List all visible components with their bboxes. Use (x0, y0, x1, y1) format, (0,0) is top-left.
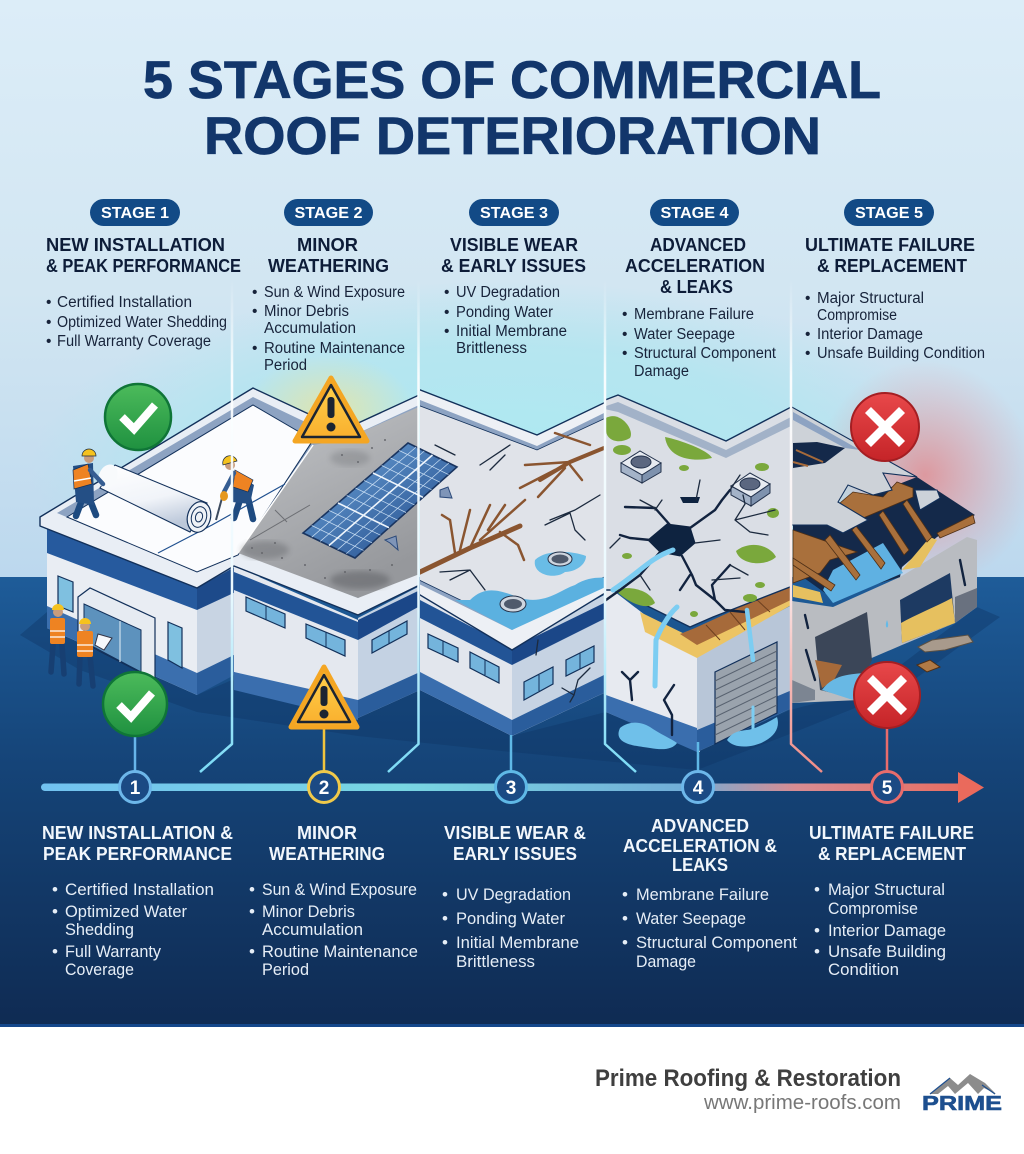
panel: stage 3 top (441, 199, 586, 357)
heading: VISIBLE WEAR & (444, 822, 586, 843)
list: • (249, 942, 255, 961)
stage 1 walls (47, 528, 240, 695)
wall cracks (622, 672, 674, 735)
ponding water (455, 578, 610, 630)
stage 4 list: • (622, 326, 627, 343)
list (814, 880, 946, 979)
list: • (52, 880, 58, 899)
stage 1 list: • (46, 294, 51, 311)
status icon: upper cross (851, 393, 919, 461)
list: Brittleness (456, 952, 535, 971)
stage 5 list: Interior Damage (817, 326, 923, 343)
stage 2 badge (284, 199, 373, 226)
stage 1 heading: NEW INSTALLATION (46, 234, 225, 255)
heading (269, 822, 385, 864)
stage 2 badge: STAGE 2 (294, 205, 363, 222)
stage 4 heading (625, 234, 765, 297)
stage 5 building: ultimate failure (785, 406, 977, 703)
stage 5 list: Compromise (817, 307, 897, 324)
heading (444, 822, 586, 864)
stage 3 list: Initial Membrane (456, 323, 567, 340)
dark ground band (0, 577, 1024, 1025)
stage 2 list: Routine Maintenance (264, 340, 405, 357)
company name and website: Prime Roofing & Restoration (595, 1065, 901, 1092)
heading: WEATHERING (269, 843, 385, 864)
stage 5 heading: & REPLACEMENT (817, 255, 968, 276)
stage 4 list: • (622, 345, 627, 362)
status icon: lower check (103, 672, 167, 736)
stage 1 list: Full Warranty Coverage (57, 333, 211, 350)
list: Period (262, 960, 309, 979)
list: • (442, 885, 448, 904)
stage 3 list: Brittleness (456, 340, 527, 357)
stage 3 list: • (444, 323, 449, 340)
exposed rafters and water (793, 477, 975, 593)
stage 4 list: Damage (634, 363, 689, 380)
sky background (0, 0, 1024, 660)
membrane roll (98, 464, 212, 533)
company name and website: www.prime-roofs.com (703, 1092, 901, 1114)
torn membrane (790, 406, 917, 533)
stage 1 list: • (46, 333, 51, 350)
list: Coverage (65, 960, 134, 979)
list: Compromise (828, 899, 918, 918)
stage 3 list: Ponding Water (456, 304, 553, 321)
stage 1 list: • (46, 314, 51, 331)
list: Condition (828, 960, 899, 979)
status icon: lower cross (854, 662, 920, 728)
panel: stage 1 bottom (42, 822, 233, 979)
list: Structural Component (636, 933, 797, 952)
stage 4 list: Membrane Failure (634, 306, 754, 323)
heading: MINOR (297, 822, 357, 843)
timeline node 4 (682, 772, 714, 802)
stage 4 heading: ADVANCED (650, 234, 746, 255)
stage 5 badge: STAGE 5 (855, 205, 923, 222)
worker with tool (216, 456, 254, 520)
list: • (622, 933, 628, 952)
stage 2 list: Period (264, 357, 307, 374)
stage 3 list: • (444, 284, 449, 301)
foam and wood edge (640, 600, 790, 658)
stage 1 list: Certified Installation (57, 294, 192, 311)
panel: stage 3 bottom (442, 822, 586, 971)
list: • (52, 902, 58, 921)
list: Sun & Wind Exposure (262, 880, 417, 899)
stage 3 badge (469, 199, 559, 226)
list: • (622, 909, 628, 928)
list: • (442, 933, 448, 952)
list: Water Seepage (636, 909, 746, 928)
stage 5 list: • (805, 345, 810, 362)
connector: stage 3 (510, 735, 512, 772)
stage 2 list: Minor Debris (264, 303, 349, 320)
list: • (622, 885, 628, 904)
list: Accumulation (262, 920, 363, 939)
ground shadow (20, 607, 1000, 770)
stage 5 heading: ULTIMATE FAILURE (805, 234, 975, 255)
hole and cracks (606, 475, 775, 612)
timeline node 5 (872, 772, 902, 802)
panel: stage 4 bottom (622, 815, 797, 971)
stage 1 heading (46, 234, 241, 276)
heading: LEAKS (672, 854, 728, 875)
panel: stage 2 bottom (249, 822, 418, 979)
connector: stage 2 (323, 728, 325, 772)
status icon: upper check (105, 384, 171, 450)
panel: stage 5 bottom (809, 822, 974, 979)
heading: ACCELERATION & (623, 835, 777, 856)
stage 5 badge (844, 199, 934, 226)
heading: PEAK PERFORMANCE (43, 843, 232, 864)
heading: ULTIMATE FAILURE (809, 822, 974, 843)
list: • (814, 921, 820, 940)
title: ROOF DETERIORATION (204, 107, 821, 166)
stage 4 badge: STAGE 4 (660, 205, 729, 222)
list (249, 880, 418, 979)
stage 4 list (622, 306, 777, 380)
list: • (814, 880, 820, 899)
timeline node 3: 3 (506, 778, 516, 799)
stage 3 list (444, 284, 567, 357)
stage 2 list: Accumulation (264, 320, 356, 337)
timeline node 2 (308, 772, 340, 802)
stage 4 building: advanced leaks (600, 395, 795, 752)
company logo: PRIME (922, 1093, 1002, 1115)
leak puddles (618, 723, 677, 749)
stage 4 badge (650, 199, 739, 226)
fallen branches (418, 433, 604, 573)
stage 1 badge (90, 199, 180, 226)
stage 2 heading (268, 234, 389, 276)
panel: stage 4 top (622, 199, 777, 380)
list: Initial Membrane (456, 933, 579, 952)
stage 4 list: • (622, 306, 627, 323)
roof rim (40, 388, 430, 615)
solar panel (303, 443, 457, 558)
building illustration (20, 388, 1000, 770)
stage 2 grey roof (238, 402, 430, 598)
worker with roll (73, 449, 103, 516)
drains (500, 552, 572, 612)
panel: stage 5 top (805, 199, 985, 362)
list: Interior Damage (828, 921, 946, 940)
stage 1 list (46, 294, 227, 350)
timeline node 1 (120, 772, 150, 802)
list: Membrane Failure (636, 885, 769, 904)
stage 4 list: Structural Component (634, 345, 777, 362)
status icon: lower warning (291, 667, 357, 727)
timeline node 1: 1 (130, 778, 141, 799)
connector: stage 5 (886, 728, 888, 772)
list: Full Warranty (65, 942, 161, 961)
stage 2 list: • (252, 303, 257, 320)
connector: stage 1 (134, 736, 136, 772)
list: Damage (636, 952, 696, 971)
heading: EARLY ISSUES (453, 843, 577, 864)
moss (606, 416, 779, 617)
timeline node 2: 2 (319, 778, 329, 799)
seam (158, 484, 285, 553)
list: Optimized Water (65, 902, 187, 921)
opening right (900, 573, 955, 643)
stage 1 membrane (67, 405, 313, 572)
list: Shedding (65, 920, 134, 939)
company name and website (595, 1065, 901, 1114)
stage 2 list: Sun & Wind Exposure (264, 284, 405, 301)
list: • (814, 942, 820, 961)
stage 4 heading: ACCELERATION (625, 255, 765, 276)
debris (918, 635, 973, 652)
stage 1 badge: STAGE 1 (101, 205, 169, 222)
list: UV Degradation (456, 885, 571, 904)
stage 3 heading: VISIBLE WEAR (450, 234, 578, 255)
list: • (249, 902, 255, 921)
list: Minor Debris (262, 902, 355, 921)
stage 3 building: visible wear (415, 388, 610, 736)
list (52, 880, 214, 979)
panel: stage 1 top (46, 199, 241, 350)
list: Major Structural (828, 880, 945, 899)
connector: stage 4 (697, 742, 699, 772)
broken wall (785, 537, 977, 703)
stage 2 walls (234, 566, 420, 720)
list (442, 885, 579, 971)
timeline node 4: 4 (693, 778, 704, 799)
stage 2 list: • (252, 340, 257, 357)
stage 5 list: • (805, 290, 810, 307)
water drop (886, 620, 888, 628)
opening left (815, 612, 872, 700)
list: • (52, 942, 58, 961)
stage 2 list (252, 284, 405, 374)
list: Routine Maintenance (262, 942, 418, 961)
status icon: upper warning (295, 378, 367, 441)
list: Certified Installation (65, 880, 214, 899)
stage 3 heading: & EARLY ISSUES (441, 255, 586, 276)
stage 5 list: Major Structural (817, 290, 924, 307)
heading (623, 815, 777, 875)
heading (42, 822, 233, 864)
stage 1 and 2 building: new and weathered (40, 388, 430, 720)
company logo (922, 1074, 1002, 1115)
stage 5 list (805, 290, 985, 362)
heading (809, 822, 974, 864)
stage 2 list: • (252, 284, 257, 301)
panel: stage 2 top (252, 199, 405, 374)
water streaks (613, 550, 753, 733)
footer band (0, 1024, 1024, 1154)
timeline node 3 (496, 772, 526, 802)
timeline with arrow (41, 772, 984, 803)
garage door (715, 642, 777, 744)
stage 5 list: Unsafe Building Condition (817, 345, 985, 362)
stage 3 list: • (444, 304, 449, 321)
title (143, 51, 881, 166)
stage 3 badge: STAGE 3 (480, 205, 548, 222)
list: • (249, 880, 255, 899)
list: • (442, 909, 448, 928)
stage 3 heading (441, 234, 586, 276)
list: Unsafe Building (828, 942, 946, 961)
stage 3 list: UV Degradation (456, 284, 560, 301)
stage 1 heading: & PEAK PERFORMANCE (46, 255, 241, 276)
list (622, 885, 797, 971)
list: Ponding Water (456, 909, 565, 928)
timeline node 5: 5 (882, 778, 893, 799)
stage 2 heading: MINOR (297, 234, 358, 255)
stage 5 list: • (805, 326, 810, 343)
stage 4 heading: & LEAKS (660, 276, 733, 297)
heading: NEW INSTALLATION & (42, 822, 233, 843)
heading: & REPLACEMENT (818, 843, 967, 864)
debris speckle (241, 439, 393, 589)
title: 5 STAGES OF COMMERCIAL (143, 51, 881, 110)
roof membrane (600, 395, 795, 627)
stage 5 heading (805, 234, 975, 276)
heading: ADVANCED (651, 815, 749, 836)
stage 1 list: Optimized Water Shedding (57, 314, 227, 331)
stage dividers (200, 280, 822, 772)
stage 4 list: Water Seepage (634, 326, 735, 343)
stage 2 heading: WEATHERING (268, 255, 389, 276)
vents (621, 451, 770, 506)
inspector workers (50, 604, 112, 686)
